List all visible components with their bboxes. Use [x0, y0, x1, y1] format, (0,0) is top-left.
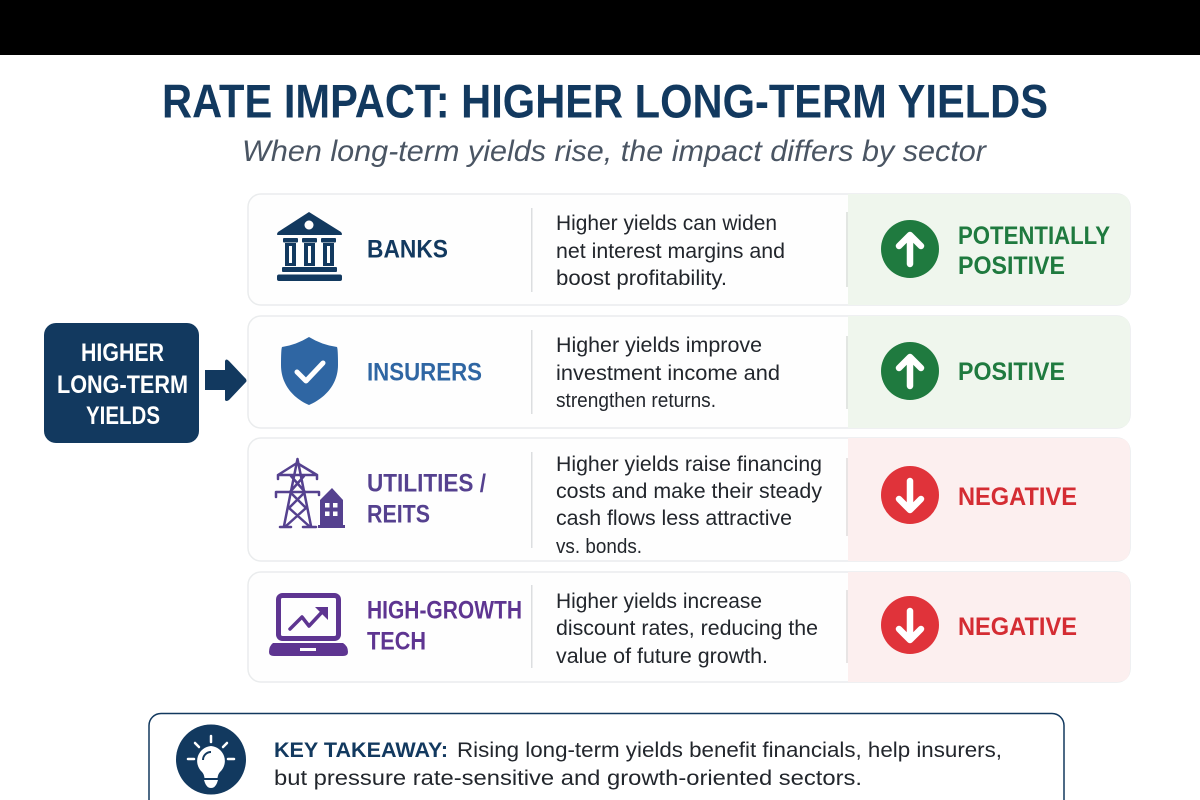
description: banks: Higher yields can widen — [556, 212, 777, 235]
verdict background: insurers — [848, 316, 1130, 428]
description: tech — [556, 590, 818, 668]
verdict: potentially positive — [958, 222, 1110, 280]
verdict background: banks — [848, 194, 1130, 305]
takeaway text — [274, 739, 1002, 790]
icon: down arrow — [881, 466, 939, 524]
icon: laptop with chart — [269, 596, 348, 656]
sector name: insurers: INSURERS — [367, 358, 482, 386]
icon: up arrow — [881, 220, 939, 278]
description: tech: discount rates, reducing the — [556, 617, 818, 640]
sector name: high-growth tech — [367, 596, 522, 656]
source box: higher long-term yields: YIELDS — [86, 402, 160, 430]
verdict background: tech — [848, 572, 1130, 682]
description: utilities: Higher yields raise financing — [556, 453, 822, 476]
panel: insurers row — [248, 316, 1130, 428]
sector name: utilities / REITs: UTILITIES / — [367, 470, 486, 498]
source box: higher long-term yields: LONG-TERM — [57, 371, 188, 399]
takeaway text: Rising long-term yields benefit financials, help insurers, — [457, 739, 1002, 762]
description: utilities: vs. bonds. — [556, 536, 642, 558]
icon: down arrow — [881, 596, 939, 654]
description: tech: Higher yields increase — [556, 590, 762, 613]
panel: utilities and REITs row — [248, 438, 1130, 561]
top black band — [0, 0, 1200, 55]
description: insurers — [556, 334, 780, 412]
description: insurers: investment income and — [556, 362, 780, 385]
verdict: negative: NEGATIVE — [958, 483, 1077, 511]
sector name: utilities / REITs: REITS — [367, 500, 430, 528]
icon: up arrow — [881, 342, 939, 400]
icon: shield with check — [281, 337, 338, 405]
description: utilities — [556, 453, 823, 558]
verdict: negative: NEGATIVE — [958, 613, 1077, 641]
verdict: potentially positive: POSITIVE — [958, 252, 1065, 280]
description: utilities: cash flows less attractive — [556, 507, 792, 530]
sector name: high-growth tech: TECH — [367, 628, 426, 656]
panel: banks row — [248, 194, 1130, 305]
description: utilities: costs and make their steady — [556, 480, 823, 503]
verdict background: utilities — [848, 438, 1130, 561]
description: banks: net interest margins and — [556, 240, 785, 263]
takeaway text: but pressure rate-sensitive and growth-oriented sectors. — [274, 767, 862, 790]
verdict: positive: POSITIVE — [958, 358, 1065, 386]
description: insurers: Higher yields improve — [556, 334, 762, 357]
subtitle: When long-term yields rise, the impact differs by sector — [242, 135, 987, 168]
panel: high-growth tech row — [248, 572, 1130, 682]
description: banks — [556, 212, 785, 290]
source box: higher long-term yields: HIGHER — [81, 339, 164, 367]
icon: bank building — [277, 212, 342, 281]
icon: pylon and building — [276, 459, 345, 528]
title: RATE IMPACT: HIGHER LONG-TERM YIELDS — [162, 74, 1048, 128]
icon: light bulb — [176, 724, 246, 794]
sector name: utilities / REITs — [367, 470, 486, 528]
sector name: banks: BANKS — [367, 236, 448, 264]
sector name: high-growth tech: HIGH-GROWTH — [367, 596, 522, 624]
description: tech: value of future growth. — [556, 645, 768, 668]
callout: key takeaway — [149, 714, 1064, 800]
description: banks: boost profitability. — [556, 267, 727, 290]
description: insurers: strengthen returns. — [556, 390, 716, 412]
arrow: source to sectors — [205, 360, 246, 401]
source box: higher long-term yields — [44, 323, 199, 443]
verdict: potentially positive: POTENTIALLY — [958, 222, 1110, 250]
takeaway text: KEY TAKEAWAY: — [274, 739, 448, 762]
